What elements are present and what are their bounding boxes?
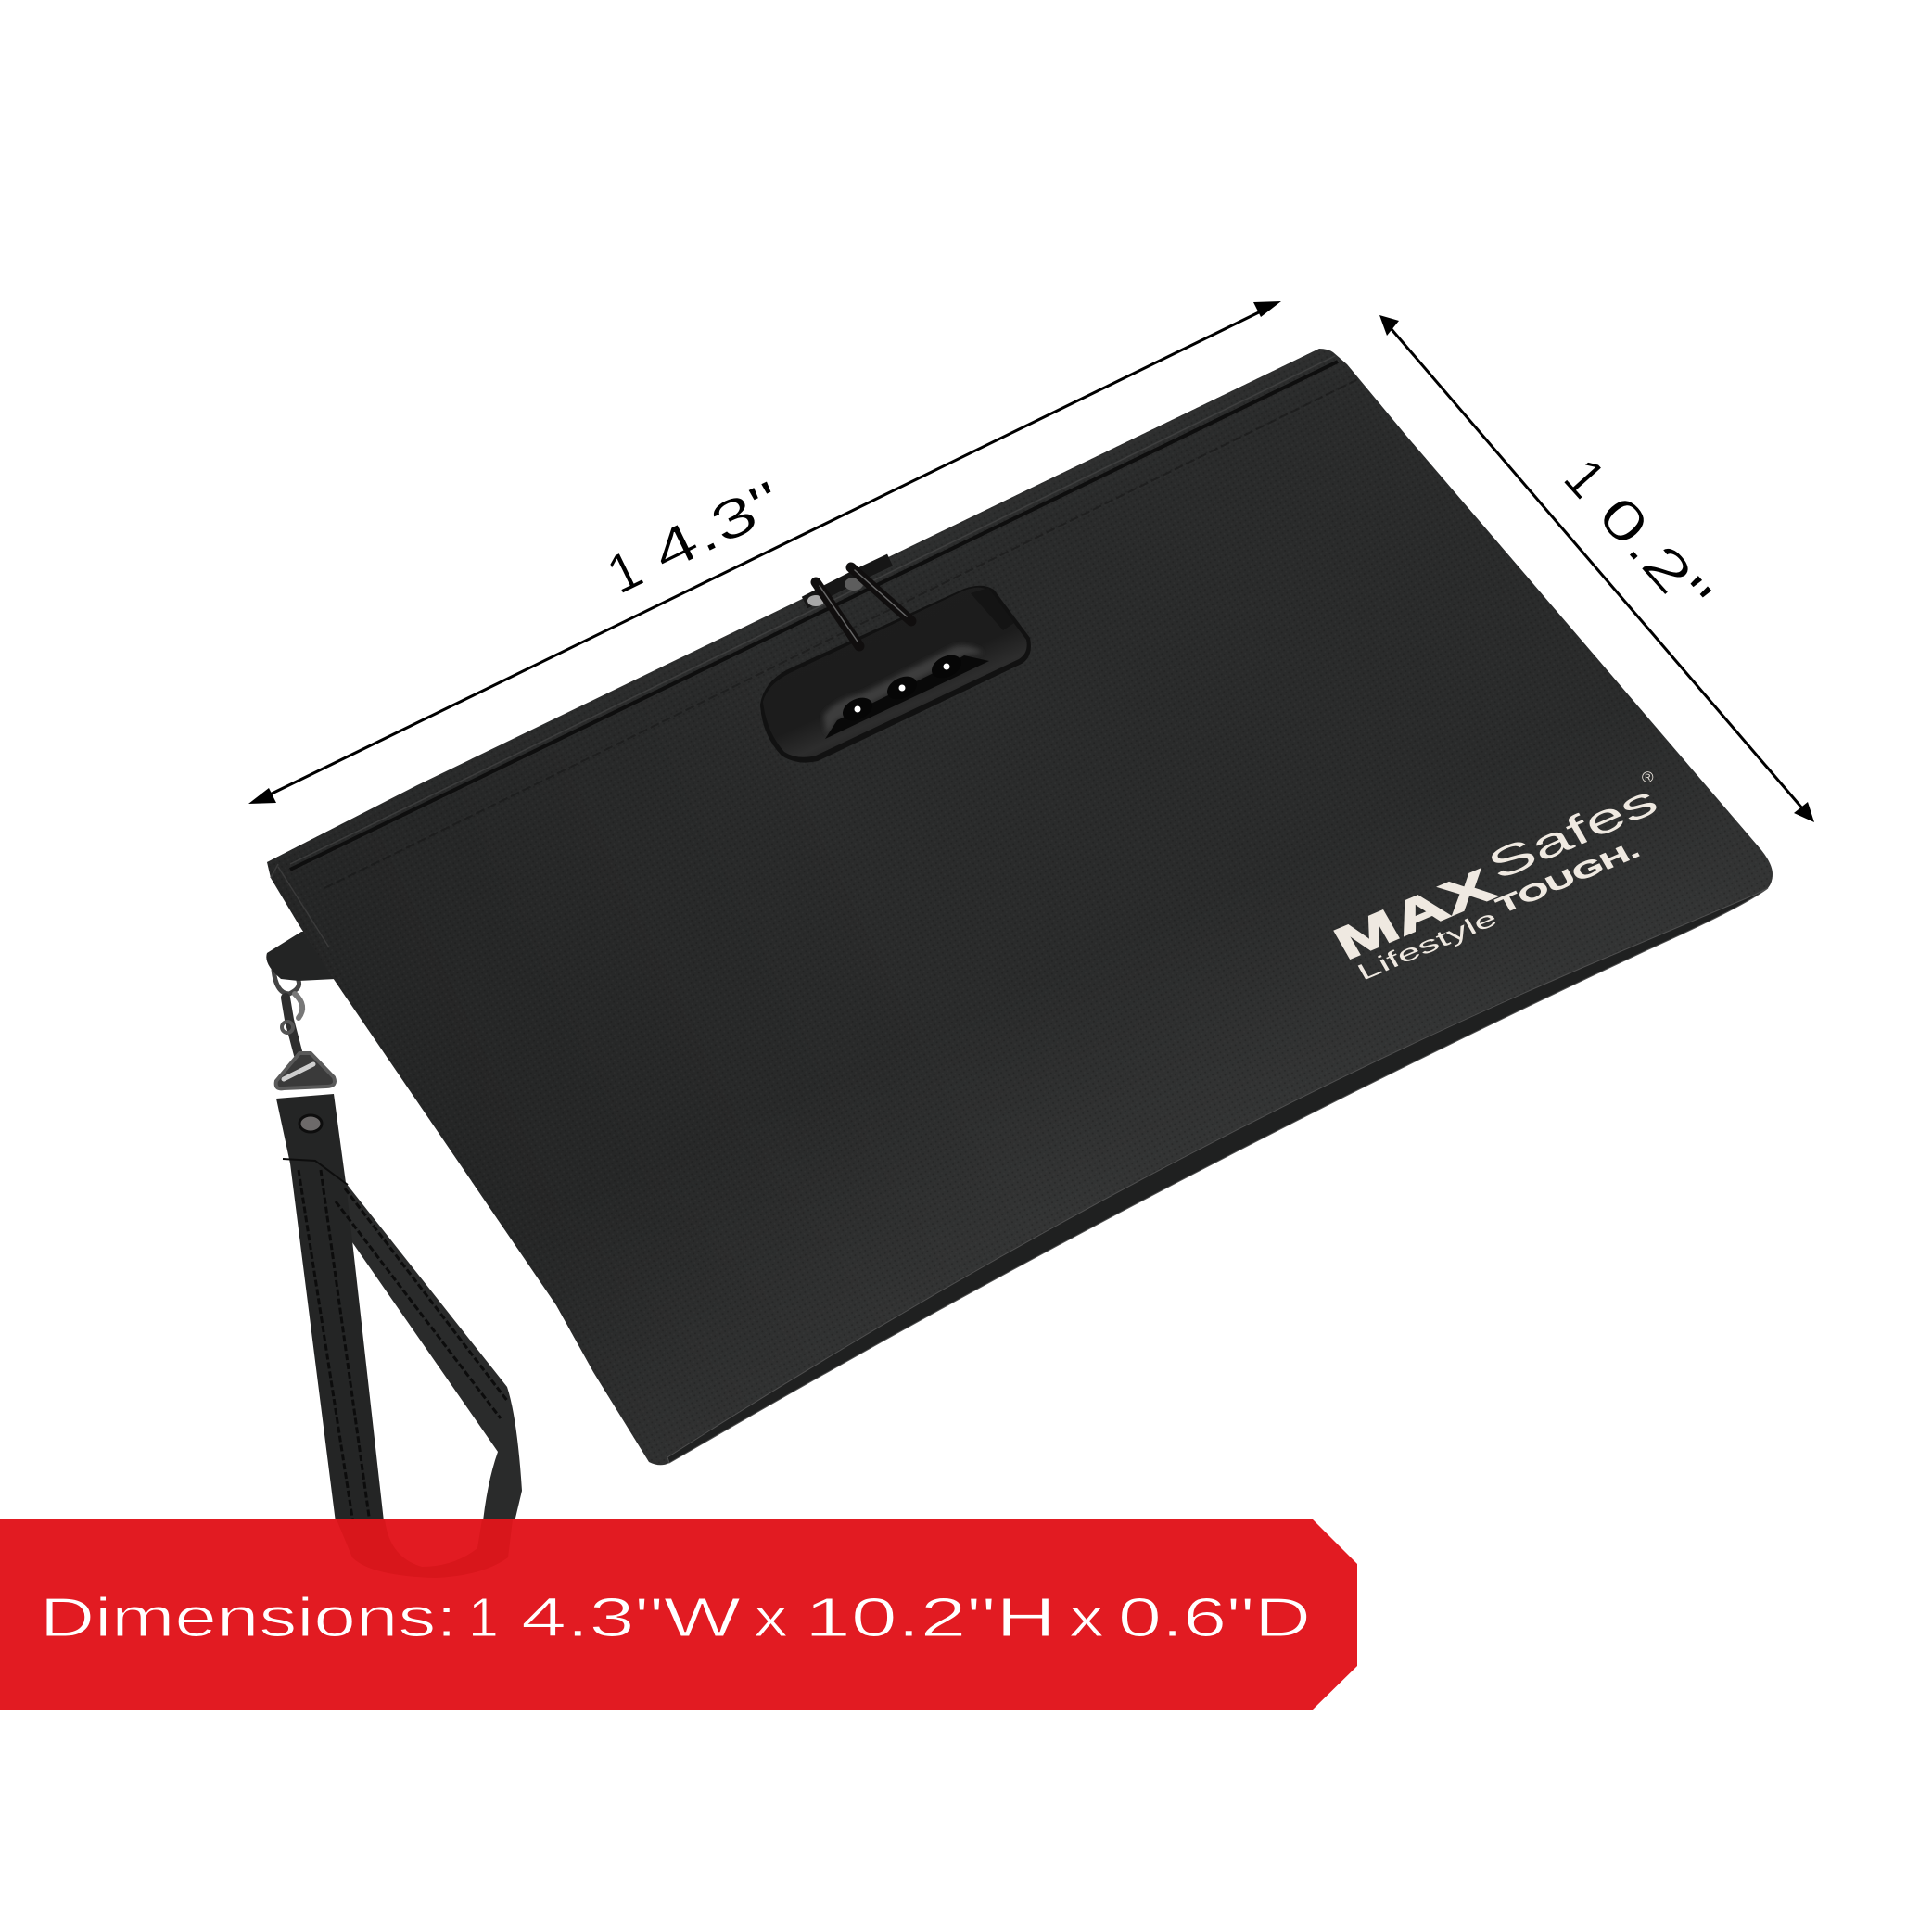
strap showing through banner <box>337 1519 513 1578</box>
swivel clasp <box>273 970 335 1088</box>
wrist strap <box>276 1094 522 1530</box>
dimension label: 14.3 inches: 1 <box>597 538 652 606</box>
banner text: 1 <box>468 1587 499 1648</box>
lock housing <box>763 588 1027 757</box>
zipper pulls <box>805 560 890 606</box>
banner text: 10.2"H <box>805 1587 1056 1648</box>
banner text <box>40 1587 1311 1648</box>
dimension label: 14.3 inches: 4.3" <box>642 469 792 584</box>
left side seam <box>271 864 329 947</box>
banner text: 4.3"W <box>521 1587 741 1648</box>
combination lock <box>760 560 1031 763</box>
dimension arrow: width <box>248 301 1281 804</box>
lock shackles <box>816 567 911 646</box>
lock shadow <box>760 586 1031 763</box>
banner text: 0.6"D <box>1118 1587 1311 1648</box>
logo: Safes: Safes <box>1480 777 1666 889</box>
dimension arrow: height <box>1379 315 1814 822</box>
bag fabric texture <box>267 349 1773 1465</box>
red banner <box>0 1519 1357 1710</box>
lock wheels <box>839 651 965 725</box>
bag body <box>267 349 1773 1465</box>
bag left shading <box>267 349 1773 1465</box>
bag tab <box>266 932 336 981</box>
banner text: x <box>1069 1587 1104 1648</box>
zipper seam <box>290 356 1356 888</box>
bottom flap edge <box>667 888 1768 1463</box>
dimension label: 10.2 inches <box>1552 446 1722 627</box>
dimension label: 10.2 inches: 0.2" <box>1586 484 1722 627</box>
lock dial slot <box>825 655 989 739</box>
logo: Lifestyle: Lifestyle <box>1353 905 1502 985</box>
logo: TOUGH: TOUGH. <box>1492 837 1645 919</box>
logo: MAX: MAX <box>1326 859 1503 970</box>
banner text: x <box>754 1587 788 1648</box>
dimension label: 10.2 inches: 1 <box>1552 446 1618 510</box>
lock highlight band <box>823 645 983 734</box>
strap rivet <box>299 1115 322 1132</box>
dimension label: 14.3 inches <box>597 469 792 606</box>
MAXSafes logo <box>1326 769 1666 985</box>
lock release button <box>971 588 1014 630</box>
banner text: Dimensions: <box>40 1587 457 1648</box>
document bag <box>267 349 1773 1465</box>
logo: registered mark: ® <box>1642 769 1654 786</box>
